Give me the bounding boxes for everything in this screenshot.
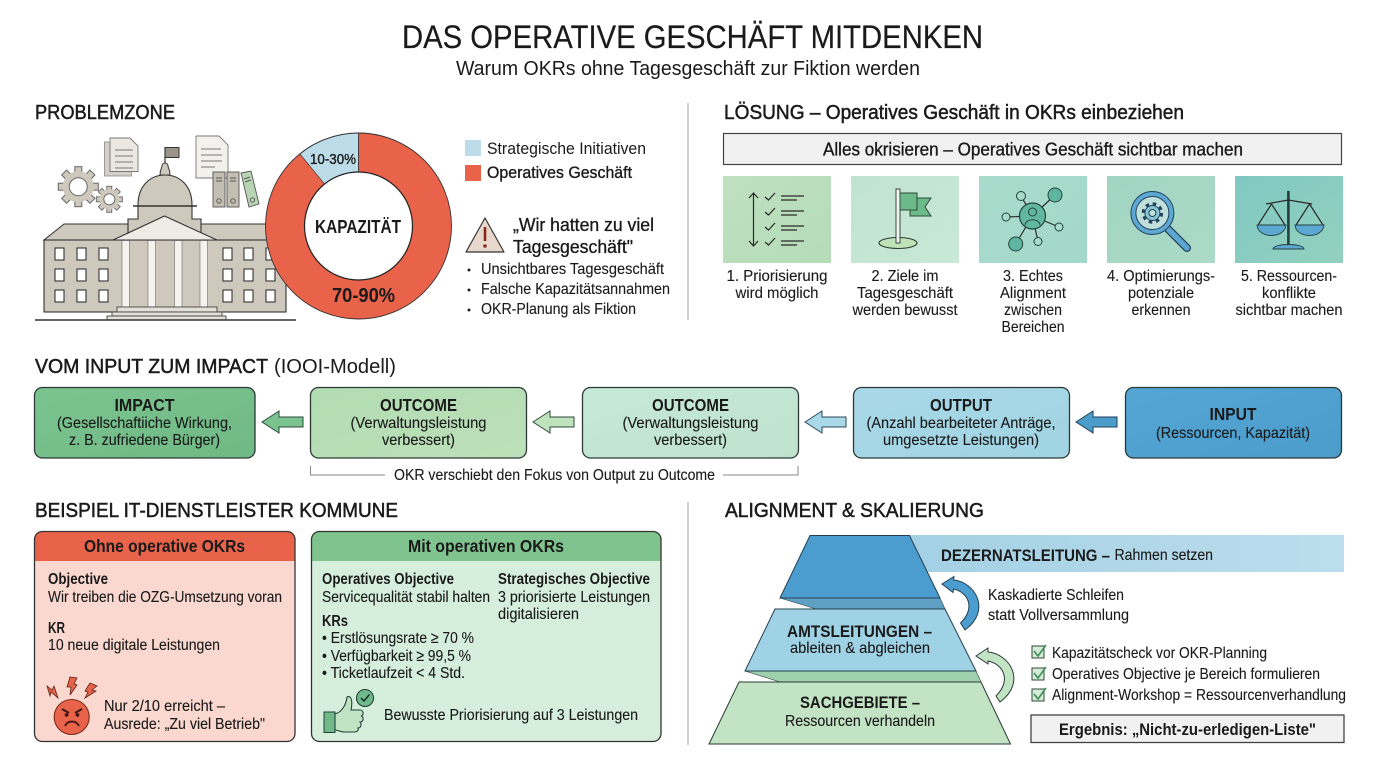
tile 3: Alignment: zwischen [1004, 302, 1062, 319]
tile 4: Optimierungspotenziale: potenziale [1128, 285, 1194, 302]
heading: Alignment: ALIGNMENT & SKALIERUNG [725, 499, 984, 522]
card: Mit operativen OKRs: • Verfügbarkeit ≥ 99,5 % [322, 648, 471, 665]
arrow: outcome to impact [262, 411, 303, 433]
card: Ohne operative OKRs: Ausrede: „Zu viel Betrieb" [104, 716, 265, 733]
quote: „Wir hatten zu viel [513, 214, 654, 235]
icon: binders [213, 171, 259, 207]
box: Output: OUTPUT [930, 395, 992, 415]
pyramid: levels: ableiten & abgleichen [790, 640, 930, 657]
card: Mit operativen OKRs: Operatives Objective [322, 571, 454, 588]
card: Mit operativen OKRs: Mit operativen OKRs [408, 536, 564, 556]
tile 5: Ressourcenkonflikte [1235, 176, 1343, 319]
box: Outcome 1: OUTCOME [380, 395, 457, 415]
tile 3: Alignment [979, 176, 1087, 336]
tile 4: Optimierungspotenziale [1107, 176, 1215, 319]
checklist [1032, 645, 1346, 704]
donut chart: capacity [266, 133, 452, 319]
box: Outcome 2: OUTCOME [652, 395, 729, 415]
box: Output: (Anzahl bearbeiteter Anträge, [866, 415, 1056, 432]
banner: Dezernatsleitung: DEZERNATSLEITUNG – [941, 547, 1110, 565]
heading: Beispiel: BEISPIEL IT-DIENSTLEISTER KOMMUNE [35, 499, 398, 522]
box: Input: INPUT [1210, 404, 1257, 424]
box: Input [1126, 388, 1342, 458]
icon: warning triangle [466, 218, 504, 252]
icon: thumbs up with check [324, 690, 374, 732]
icon: town hall building [35, 147, 296, 320]
banner: Dezernatsleitung [900, 535, 1344, 572]
box: Outcome 2: verbessert) [654, 432, 727, 449]
tile 2: Ziele im Tagesgeschäft: 2. Ziele im [872, 268, 938, 285]
legend [465, 140, 646, 182]
bullet list: problems [468, 261, 670, 318]
heading: Problemzone: PROBLEMZONE [35, 101, 175, 124]
heading: Vom Input zum Impact: VOM INPUT ZUM IMPACT [35, 355, 268, 378]
tile 1: Priorisierung: wird möglich [735, 285, 818, 302]
legend: Operatives Geschäft [487, 164, 632, 182]
panel: Problemzone [35, 101, 670, 320]
tile 5: Ressourcenkonflikte: sichtbar machen [1236, 302, 1342, 319]
tile 5: Ressourcenkonflikte: konflikte [1262, 285, 1316, 302]
box: Impact: IMPACT [114, 395, 175, 415]
tile 1: Priorisierung: 1. Priorisierung [726, 268, 828, 285]
pyramid: levels: AMTSLEITUNGEN – [787, 623, 932, 641]
card: Mit operativen OKRs: digitalisieren [498, 606, 579, 623]
card: Mit operativen OKRs: Bewusste Priorisierung auf 3 Leistungen [384, 707, 638, 724]
box: Outcome 1: verbessert) [382, 432, 455, 449]
card: Mit operativen OKRs: Servicequalität stabil halten [322, 589, 490, 606]
heading: Vom Input zum Impact: (IOOI-Modell) [274, 355, 396, 378]
tile 3: Alignment: 3. Echtes [1003, 268, 1063, 285]
card: Mit operativen OKRs: 3 priorisierte Leistungen [498, 589, 650, 606]
box: Outcome 2: (Verwaltungsleistung [622, 415, 758, 432]
checklist: Kapazitätscheck vor OKR-Planning [1052, 645, 1267, 662]
icon: gears [58, 167, 122, 212]
card: Ohne operative OKRs [34, 532, 295, 742]
tile 2: Ziele im Tagesgeschäft: werden bewusst [852, 302, 958, 319]
panel: Alignment & Skalierung [709, 499, 1346, 744]
text: Kaskadierte Schleifen [988, 587, 1129, 624]
bullet list: problems: OKR-Planung als Fiktion [481, 301, 636, 318]
quote [513, 214, 654, 257]
card: Mit operativen OKRs: Strategisches Objective [498, 571, 650, 588]
card: Ohne operative OKRs: KR [48, 620, 65, 637]
tile 2: Ziele im Tagesgeschäft: Tagesgeschäft [857, 285, 954, 302]
card: Ohne operative OKRs: Wir treiben die OZG-Umsetzung voran [48, 589, 282, 606]
heading: Lösung: LÖSUNG – Operatives Geschäft in OKRs einbeziehen [724, 101, 1184, 124]
icon: documents [104, 136, 228, 178]
arrow: output to outcome [805, 411, 846, 433]
bullet list: problems: Falsche Kapazitätsannahmen [481, 281, 670, 298]
card: Mit operativen OKRs [312, 532, 661, 742]
legend: Strategische Initiativen [487, 140, 646, 158]
bracket note: OKR focus shift: OKR verschiebt den Fokus von Output zu Outcome [394, 467, 715, 484]
card: Ohne operative OKRs: Objective [48, 571, 108, 588]
box: Impact: z. B. zufriedene Bürger) [69, 432, 220, 449]
arrow: blue curved loop [942, 576, 979, 630]
box: Output: umgesetzte Leistungen) [883, 432, 1039, 449]
arrow: green curved loop [976, 648, 1014, 702]
box: Output [854, 388, 1070, 458]
bullet list: problems: Unsichtbares Tagesgeschäft [481, 261, 664, 278]
card: Mit operativen OKRs: • Ticketlaufzeit < 4 Std. [322, 665, 465, 682]
card: Mit operativen OKRs: • Erstlösungsrate ≥ 70 % [322, 630, 474, 647]
pyramid: levels: Ressourcen verhandeln [785, 713, 935, 730]
pyramid: levels [709, 536, 1010, 744]
result box: Ergebnis: „Nicht-zu-erledigen-Liste" [1059, 721, 1316, 739]
box: Outcome 2 [582, 388, 798, 458]
donut chart: capacity: 70-90% [332, 285, 395, 307]
tile 4: Optimierungspotenziale: erkennen [1132, 302, 1190, 319]
banner: Alles okrisieren [724, 134, 1342, 164]
text: Kaskadierte Schleifen: Kaskadierte Schleifen [988, 587, 1124, 604]
tile 5: Ressourcenkonflikte: 5. Ressourcen- [1241, 268, 1337, 285]
icon: angry face with lightning [47, 677, 97, 734]
card: Mit operativen OKRs: KRs [322, 613, 348, 630]
box: Outcome 1 [310, 388, 526, 458]
donut chart: capacity: KAPAZITÄT [315, 216, 402, 237]
card: Ohne operative OKRs: Nur 2/10 erreicht – [104, 698, 225, 715]
pyramid: levels: SACHGEBIETE – [800, 694, 920, 712]
arrow: outcome to outcome [533, 411, 574, 433]
box: Outcome 1: (Verwaltungsleistung [350, 415, 486, 432]
arrow: input to output [1076, 411, 1117, 433]
banner: Alles okrisieren: Alles okrisieren – Operatives Geschäft sichtbar machen [823, 140, 1243, 160]
panel: Lösung [723, 101, 1343, 336]
title: DAS OPERATIVE GESCHÄFT MITDENKEN [402, 19, 983, 55]
box: Input: (Ressourcen, Kapazität) [1156, 425, 1310, 442]
tile 1: Priorisierung [723, 176, 831, 302]
checklist: Operatives Objective je Bereich formulieren [1052, 666, 1320, 683]
banner: Dezernatsleitung: Rahmen setzen [1114, 547, 1213, 564]
card: Ohne operative OKRs: 10 neue digitale Leistungen [48, 637, 220, 654]
tile 4: Optimierungspotenziale: 4. Optimierungs- [1107, 268, 1215, 285]
panel: Beispiel IT-Dienstleister [34, 499, 661, 742]
tile 2: Ziele im Tagesgeschäft [851, 176, 959, 319]
quote: Tagesgeschäft" [513, 236, 633, 257]
box: Impact [34, 388, 255, 458]
subtitle: Warum OKRs ohne Tagesgeschäft zur Fiktion werden [456, 58, 920, 80]
tile 3: Alignment: Alignment [1000, 285, 1067, 302]
donut chart: capacity: 10-30% [310, 152, 356, 168]
box: Impact: (Gesellschaftiiche Wirkung, [57, 415, 232, 432]
card: Ohne operative OKRs: Ohne operative OKRs [84, 536, 245, 556]
tile 3: Alignment: Bereichen [1002, 319, 1064, 336]
text: Kaskadierte Schleifen: statt Vollversammlung [988, 607, 1129, 624]
panel: IOOI-Modell [34, 355, 1342, 484]
result box [1031, 715, 1344, 742]
